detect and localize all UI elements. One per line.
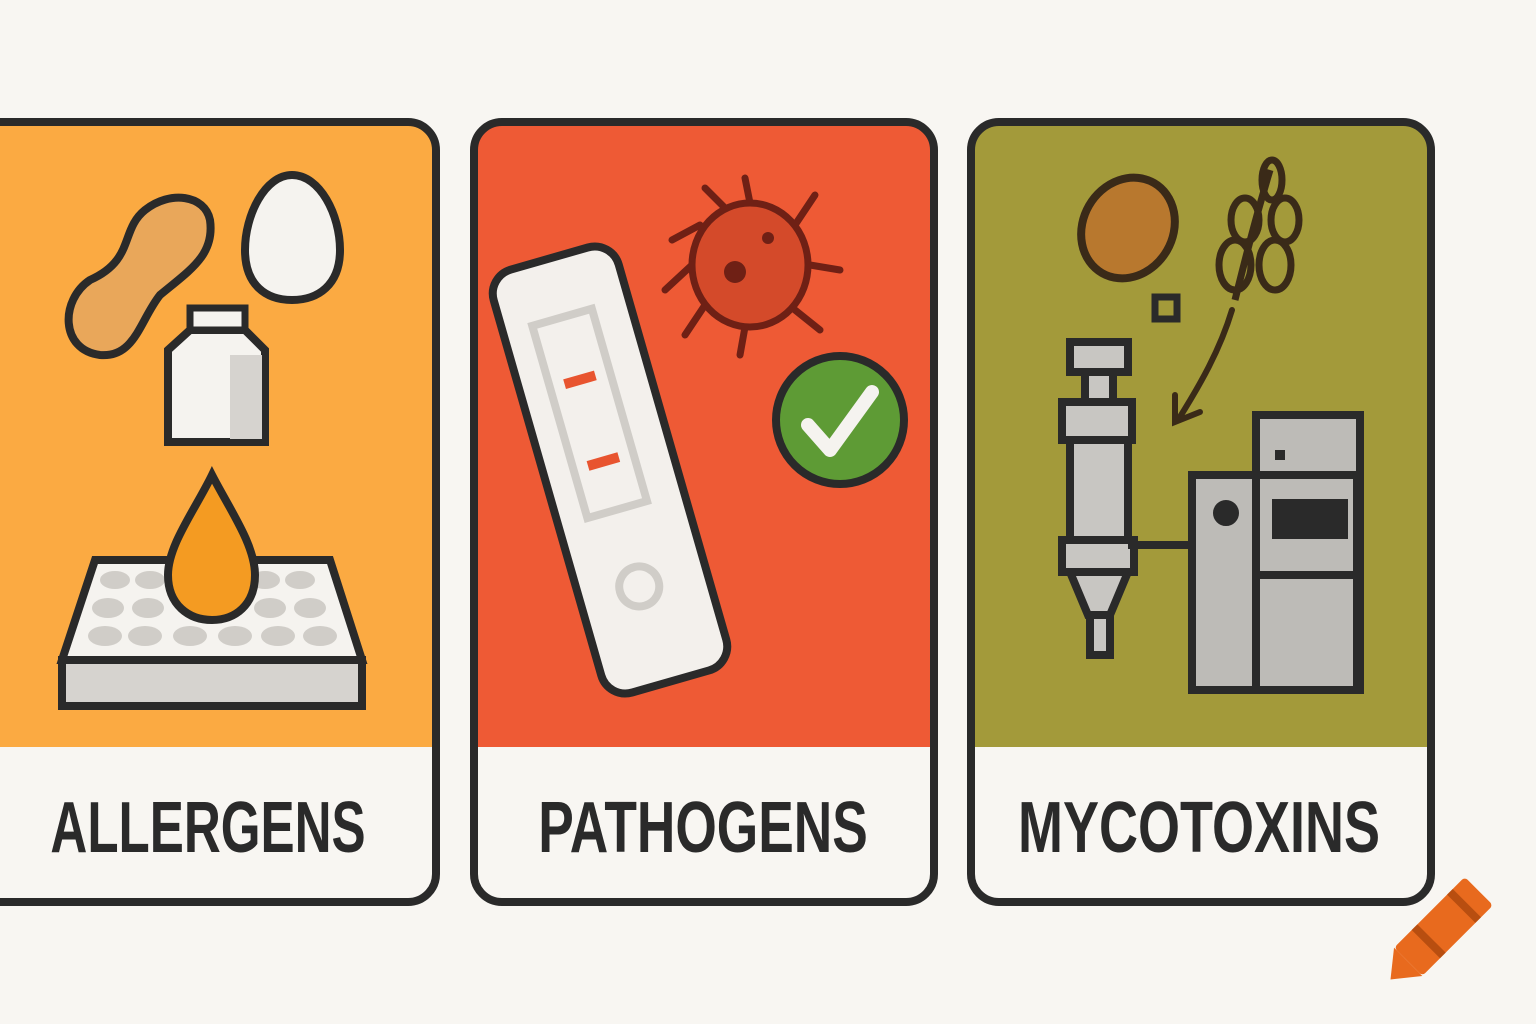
panel: allergens: [0, 122, 436, 907]
icon: crayon: [1376, 877, 1493, 994]
icon: arrow: [1175, 310, 1232, 422]
label: pathogens: PATHOGENS: [538, 788, 868, 868]
icon: test strip: [487, 241, 733, 699]
icon: wheat: [1219, 160, 1299, 300]
label: allergens: ALLERGENS: [50, 787, 366, 868]
panel: pathogens: [474, 122, 934, 902]
icon: milk carton: [168, 308, 265, 442]
label: mycotoxins: MYCOTOXINS: [1018, 788, 1380, 868]
icon: almond: [1063, 160, 1193, 296]
icon: peanut: [69, 198, 211, 355]
icon: check badge: [776, 356, 904, 484]
icon: syringe column: [1062, 342, 1134, 655]
icon: egg: [245, 175, 340, 300]
icon: analyzer machine: [1192, 415, 1360, 690]
icon: microplate with drop: [62, 475, 362, 706]
icon: bacterium: [665, 178, 840, 355]
panel: mycotoxins: [971, 122, 1431, 902]
